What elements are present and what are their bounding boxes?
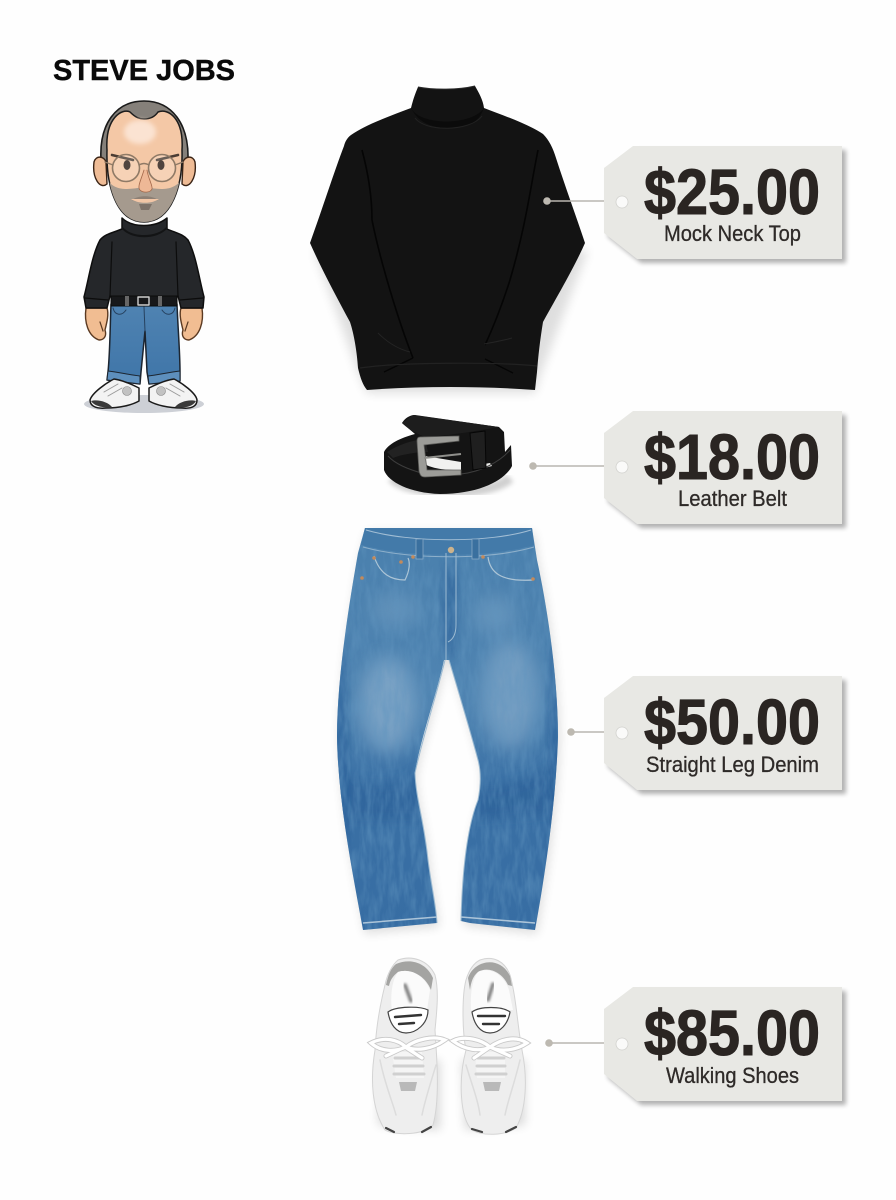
price: $18.00 xyxy=(644,421,820,493)
tag hole xyxy=(616,1038,628,1050)
item name: Leather Belt xyxy=(678,486,788,511)
tag shadow xyxy=(608,680,846,794)
ground shadow xyxy=(84,395,204,413)
item: white walking shoes xyxy=(371,958,527,1134)
right shoe xyxy=(453,958,527,1134)
price: $50.00 xyxy=(644,686,820,758)
left shoe xyxy=(371,958,445,1134)
tag body xyxy=(604,146,842,259)
item: black mock neck sweater xyxy=(310,86,588,393)
price tag: walking shoes xyxy=(545,987,846,1105)
tag hole xyxy=(616,461,628,473)
price tag: leather belt xyxy=(529,411,846,528)
item: straight leg denim jeans xyxy=(332,525,564,935)
hands xyxy=(86,308,202,340)
tag hole xyxy=(616,727,628,739)
item name: Mock Neck Top xyxy=(664,221,801,246)
sneakers xyxy=(90,379,197,408)
price tag: mock neck top xyxy=(543,146,846,263)
tag body xyxy=(604,987,842,1101)
item name: Straight Leg Denim xyxy=(646,752,819,777)
head xyxy=(94,101,195,225)
connector xyxy=(545,1039,604,1047)
cartoon figure of Steve Jobs xyxy=(84,101,204,413)
tag body xyxy=(604,411,842,524)
price: $25.00 xyxy=(644,156,820,228)
jeans xyxy=(107,304,180,384)
item name: Walking Shoes xyxy=(666,1063,799,1088)
inner gap xyxy=(422,456,492,470)
connector xyxy=(567,728,604,736)
tag shadow xyxy=(608,150,846,263)
title: STEVE JOBS xyxy=(53,55,235,87)
connector xyxy=(529,462,604,470)
item: leather belt xyxy=(384,415,512,494)
tag shadow xyxy=(608,991,846,1105)
tag body xyxy=(604,676,842,790)
connector xyxy=(543,197,604,205)
black turtleneck xyxy=(84,218,204,308)
price: $85.00 xyxy=(644,997,820,1069)
tag shadow xyxy=(608,415,846,528)
tag hole xyxy=(616,196,628,208)
price tag: straight leg denim xyxy=(567,676,846,794)
belt xyxy=(111,296,177,306)
